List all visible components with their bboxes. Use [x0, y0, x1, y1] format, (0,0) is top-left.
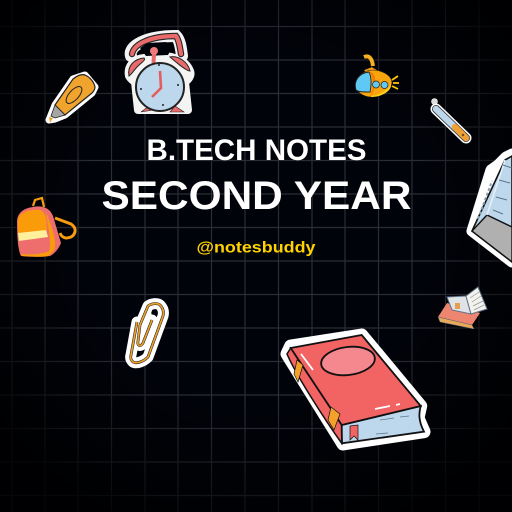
icon: alarm clock	[129, 36, 191, 112]
title: SECOND YEAR: SECOND YEAR	[102, 174, 412, 218]
icon: red book	[287, 335, 424, 444]
title: B.TECH NOTES: B.TECH NOTES	[146, 134, 366, 167]
handle: @notesbuddy: @notesbuddy	[196, 240, 316, 256]
icon: test tube	[432, 98, 466, 138]
icon: highlighter marker	[49, 75, 95, 123]
icon: open book stack	[438, 287, 487, 329]
icon: submarine	[355, 56, 399, 97]
icon: backpack	[17, 198, 75, 257]
icon: large blue book, cropped at right edge	[472, 154, 512, 262]
icon: paperclip	[131, 304, 163, 363]
